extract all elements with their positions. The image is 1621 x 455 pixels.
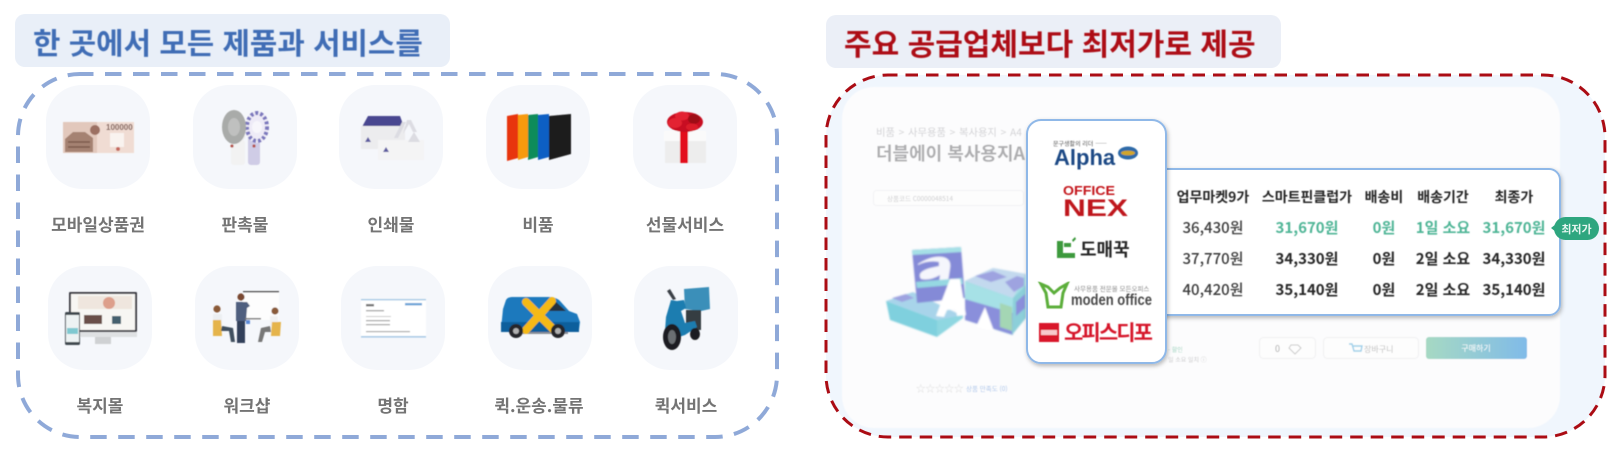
item: business card (341, 266, 445, 417)
table row 1: 36,430원 (1182, 217, 1244, 238)
item: workshop (195, 266, 299, 417)
item: delivery van (488, 266, 592, 417)
logo: Alpha: 문구생활의 리더 —— (1053, 139, 1107, 148)
logo: Moden Office: moden office (1071, 292, 1152, 309)
item: printed matter (339, 85, 443, 236)
table header: 배송기간 (1417, 187, 1469, 207)
logo: Office Depot: 오피스디포 (1064, 317, 1153, 347)
table row 3: 0원 (1373, 279, 1395, 300)
buy button (1426, 337, 1527, 359)
price table card (1130, 169, 1560, 315)
table row 1: 0원 (1373, 217, 1395, 238)
buy button: 구매하기 (1461, 343, 1491, 354)
label: 워크샵 (224, 392, 271, 417)
table header: 업무마켓9가 (1177, 187, 1249, 207)
table row 1: 1일 소요 (1416, 217, 1470, 238)
table header: 배송비 (1365, 187, 1403, 207)
label: 인쇄물 (368, 211, 414, 236)
label: 비품 (522, 211, 554, 236)
logo: Office NEX: OFFICE (1063, 183, 1115, 198)
table header: 스마트핀클럽가 (1262, 187, 1352, 207)
lowest price badge (1551, 217, 1599, 240)
heading box: right title: 주요 공급업체보다 최저가로 제공 (844, 20, 1256, 64)
table row 3: 35,140원 (1483, 279, 1545, 300)
dashed frame: left (18, 74, 777, 437)
label: 퀵서비스 (655, 392, 717, 417)
delivery note: - 할인 (1168, 345, 1183, 354)
quantity button (1260, 338, 1316, 358)
supplier logos card (1027, 120, 1166, 363)
label: 모바일상품권 (51, 211, 145, 236)
product title: 더블에이 복사용지A (876, 140, 1026, 166)
product code field (874, 190, 1024, 206)
table row 2: 34,330원 (1276, 248, 1338, 269)
logo: Office NEX: NEX (1063, 195, 1128, 222)
table row 3: 40,420원 (1182, 279, 1244, 300)
logo: Alpha: Alpha (1054, 145, 1116, 170)
faded product page (842, 87, 1560, 428)
table row 3: 35,140원 (1276, 279, 1338, 300)
label: 선물서비스 (646, 211, 724, 236)
stars and satisfaction: ☆☆☆☆☆ (916, 381, 964, 395)
logo: Moden Office: 사무용품 전문몰 모든오피스 (1074, 283, 1149, 293)
table row 3 (1182, 279, 1545, 300)
logo: Domaekkuk (1057, 236, 1130, 262)
breadcrumb: 비품 > 사무용품 > 복사용지 > A4 (876, 124, 1022, 139)
item: promotional goods (193, 85, 297, 236)
logo: Moden Office (1041, 283, 1152, 309)
label: 퀵.운송.물류 (494, 392, 584, 417)
label: 명함 (377, 392, 409, 417)
logo: Office NEX (1063, 183, 1128, 222)
table row 1 (1182, 217, 1545, 238)
table row 2: 2일 소요 (1416, 248, 1470, 269)
item: office supplies binders (486, 85, 590, 236)
dashed frame: right (826, 75, 1605, 437)
table header (1177, 187, 1533, 207)
logo: Alpha (1053, 139, 1138, 170)
item: mobile gift card (46, 85, 150, 236)
quantity button: 0 (1275, 342, 1280, 355)
table row 2: 34,330원 (1483, 248, 1545, 269)
cart button: 장바구니 (1364, 344, 1393, 355)
product code field: 상품코드 C0000048514 (887, 193, 953, 203)
label: 복지몰 (77, 392, 123, 417)
faded product page: 일 소요 일치 ⓘ (1168, 355, 1207, 364)
lowest price badge: 최저가 (1561, 221, 1592, 237)
cart button (1324, 338, 1418, 358)
panel: lowest price offer (826, 15, 1605, 437)
heading box: left title: 한 곳에서 모든 제품과 서비스를 (33, 19, 423, 63)
table row 2: 37,770원 (1182, 248, 1244, 269)
table row 2 (1182, 248, 1545, 269)
label: 판촉물 (222, 211, 268, 236)
table row 3: 2일 소요 (1416, 279, 1470, 300)
item: welfare mall (48, 266, 152, 417)
item: mobile gift card: 100000 (106, 123, 133, 132)
table header: 최종가 (1495, 187, 1533, 207)
table row 1: 31,670원 (1276, 217, 1338, 238)
item: quick service scooter (634, 266, 738, 417)
panel: all products and services (15, 14, 777, 437)
item: gift service (633, 85, 737, 236)
table row 2: 0원 (1373, 248, 1395, 269)
product photo: paper boxes (886, 247, 1026, 337)
logo: Domaekkuk: 도매꾹 (1080, 236, 1130, 262)
stars and satisfaction: 상품 만족도 (0) (966, 383, 1008, 393)
table row 1: 31,670원 (1483, 217, 1545, 238)
stars and satisfaction (916, 381, 1008, 395)
